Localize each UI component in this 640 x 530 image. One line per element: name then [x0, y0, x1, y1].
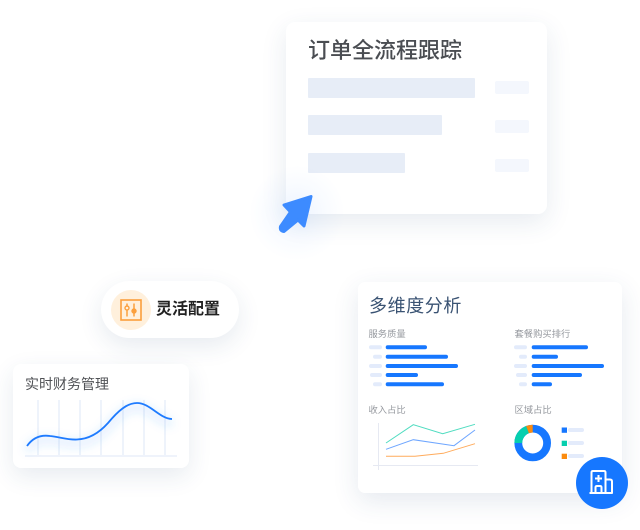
- label: flexible config: 灵活配置: [156, 301, 220, 318]
- icon: hospital button: [576, 457, 628, 509]
- chart: smooth line: [24, 400, 177, 457]
- heading: finance management: 实时财务管理: [25, 376, 109, 392]
- placeholder tag 1: [495, 81, 529, 94]
- chart: package ranking bars: [514, 345, 604, 386]
- heading: order tracking: 订单全流程跟踪: [308, 38, 462, 63]
- chart: region donut: [518, 429, 547, 457]
- panel: finance management card: [13, 364, 189, 468]
- placeholder row 3: [308, 153, 405, 173]
- label: revenue share: 收入占比: [368, 405, 406, 415]
- icon: sliders: [111, 290, 151, 330]
- heading: analysis: 多维度分析: [369, 296, 462, 316]
- chart: revenue line chart: [373, 423, 478, 470]
- panel: flexible config pill: [101, 281, 239, 338]
- label: package ranking: 套餐购买排行: [514, 328, 570, 338]
- placeholder tag 3: [495, 159, 529, 172]
- placeholder tag 2: [495, 120, 529, 133]
- placeholder row 1: [308, 78, 475, 98]
- chart: service quality bars: [369, 345, 458, 386]
- panel: multidimensional analysis card: [358, 282, 622, 493]
- panel: order tracking card: [286, 22, 547, 214]
- label: region share: 区域占比: [514, 405, 552, 415]
- legend: region donut: [562, 428, 584, 459]
- placeholder row 2: [308, 115, 442, 135]
- charts: analysis charts: [369, 345, 604, 470]
- label: service quality: 服务质量: [368, 328, 406, 338]
- icon: arrow cursor with glow: [274, 189, 320, 236]
